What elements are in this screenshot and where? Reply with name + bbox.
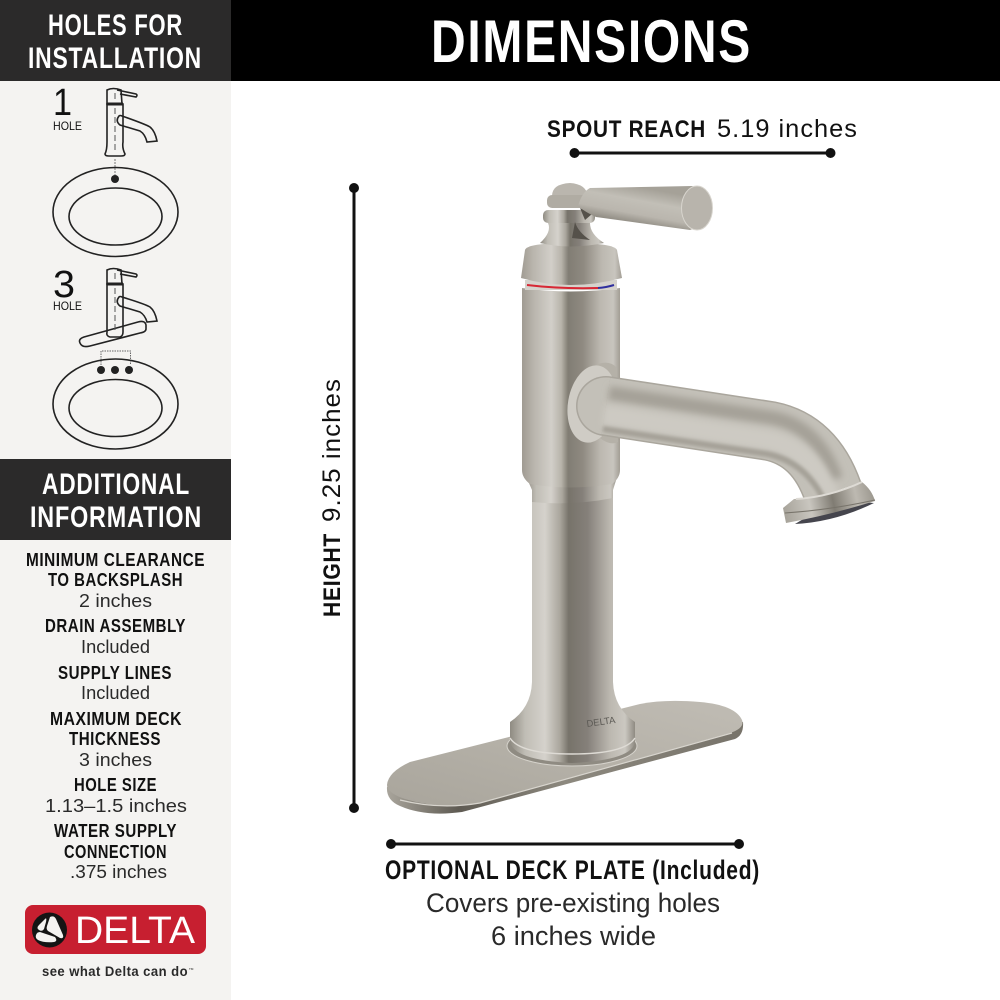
text block: additional information specs: Included bbox=[81, 636, 150, 657]
heading: additional information bbox=[0, 459, 231, 540]
text block: additional information specs: 1.13–1.5 inches bbox=[45, 795, 187, 816]
text block: additional information specs: 2 inches bbox=[79, 590, 152, 611]
neck ring bbox=[525, 474, 618, 503]
panel: 3 hole diagram: 3 bbox=[53, 264, 75, 306]
dimension: spout reach: SPOUT REACH bbox=[547, 116, 706, 143]
text block: additional information specs: WATER SUPPLY bbox=[54, 821, 177, 841]
dimension: height bbox=[318, 183, 359, 813]
dimension: optional deck plate: 6 inches wide bbox=[491, 921, 656, 951]
brand mark on collar: DELTA bbox=[586, 715, 617, 730]
arrow: spout reach line bbox=[570, 148, 836, 158]
dimension: height: 9.25 inches bbox=[318, 378, 346, 522]
text block: additional information specs bbox=[26, 550, 205, 882]
heading: holes for installation: INSTALLATION bbox=[28, 42, 202, 75]
handle cap bbox=[521, 183, 622, 290]
heading: additional information: ADDITIONAL bbox=[42, 468, 190, 501]
deck plate bbox=[387, 701, 743, 814]
text block: additional information specs: TO BACKSPLASH bbox=[48, 570, 183, 590]
icon: three hole sink bbox=[53, 359, 178, 449]
panel: 1 hole diagram: HOLE bbox=[53, 119, 82, 133]
spout mounting ring bbox=[562, 361, 622, 447]
text block: additional information specs: Included bbox=[81, 682, 150, 703]
dimension: height: HEIGHT bbox=[319, 533, 346, 617]
lever bbox=[578, 186, 712, 230]
base collar bbox=[507, 722, 637, 766]
spout bbox=[562, 361, 875, 524]
logo: Delta: see what Delta can do bbox=[42, 963, 188, 979]
icon: single hole sink bbox=[53, 168, 178, 256]
temperature indicator bbox=[527, 285, 614, 288]
heading: holes for installation bbox=[0, 0, 231, 81]
dimension: spout reach bbox=[547, 115, 858, 158]
heading: additional information: INFORMATION bbox=[30, 501, 202, 534]
heading: holes for installation: HOLES FOR bbox=[48, 9, 183, 42]
text block: additional information specs: MINIMUM CLEARANCE bbox=[26, 550, 205, 570]
text block: additional information specs: MAXIMUM DECK bbox=[50, 709, 182, 729]
text block: additional information specs: HOLE SIZE bbox=[74, 775, 157, 795]
icon: single hole faucet bbox=[105, 88, 157, 156]
aerator rim bbox=[783, 482, 875, 524]
panel: 3 hole diagram: HOLE bbox=[53, 299, 82, 313]
dimension: optional deck plate: OPTIONAL DECK PLATE (Included) bbox=[385, 855, 760, 885]
text block: additional information specs: DRAIN ASSEMBLY bbox=[45, 616, 186, 636]
logo: Delta: TM bbox=[189, 967, 194, 971]
title bar: dimensions: DIMENSIONS bbox=[431, 8, 752, 75]
illustration: brushed nickel faucet bbox=[387, 183, 875, 814]
text block: additional information specs: SUPPLY LINES bbox=[58, 663, 172, 683]
logo: Delta: DELTA bbox=[75, 910, 196, 952]
dimension: optional deck plate bbox=[385, 839, 760, 951]
pipe bbox=[510, 482, 635, 746]
panel: 1 hole diagram: 1 bbox=[53, 82, 72, 124]
text block: additional information specs: 3 inches bbox=[79, 749, 152, 770]
text block: additional information specs: CONNECTION bbox=[64, 842, 167, 862]
dimension: optional deck plate: Covers pre-existing holes bbox=[426, 888, 720, 918]
arrow: deck plate line bbox=[386, 839, 744, 849]
panel: 1 hole diagram bbox=[53, 82, 178, 256]
icon: faucet with deck plate bbox=[80, 268, 157, 347]
arrow: height line bbox=[349, 183, 359, 813]
dimension: spout reach: 5.19 inches bbox=[717, 115, 858, 143]
text block: additional information specs: THICKNESS bbox=[69, 729, 161, 749]
title bar: dimensions bbox=[231, 0, 1000, 81]
panel: 3 hole diagram bbox=[53, 264, 178, 449]
panel: sidebar background bbox=[0, 0, 231, 1000]
logo: Delta bbox=[25, 905, 206, 979]
text block: additional information specs: .375 inches bbox=[70, 861, 167, 882]
body bbox=[522, 288, 620, 488]
